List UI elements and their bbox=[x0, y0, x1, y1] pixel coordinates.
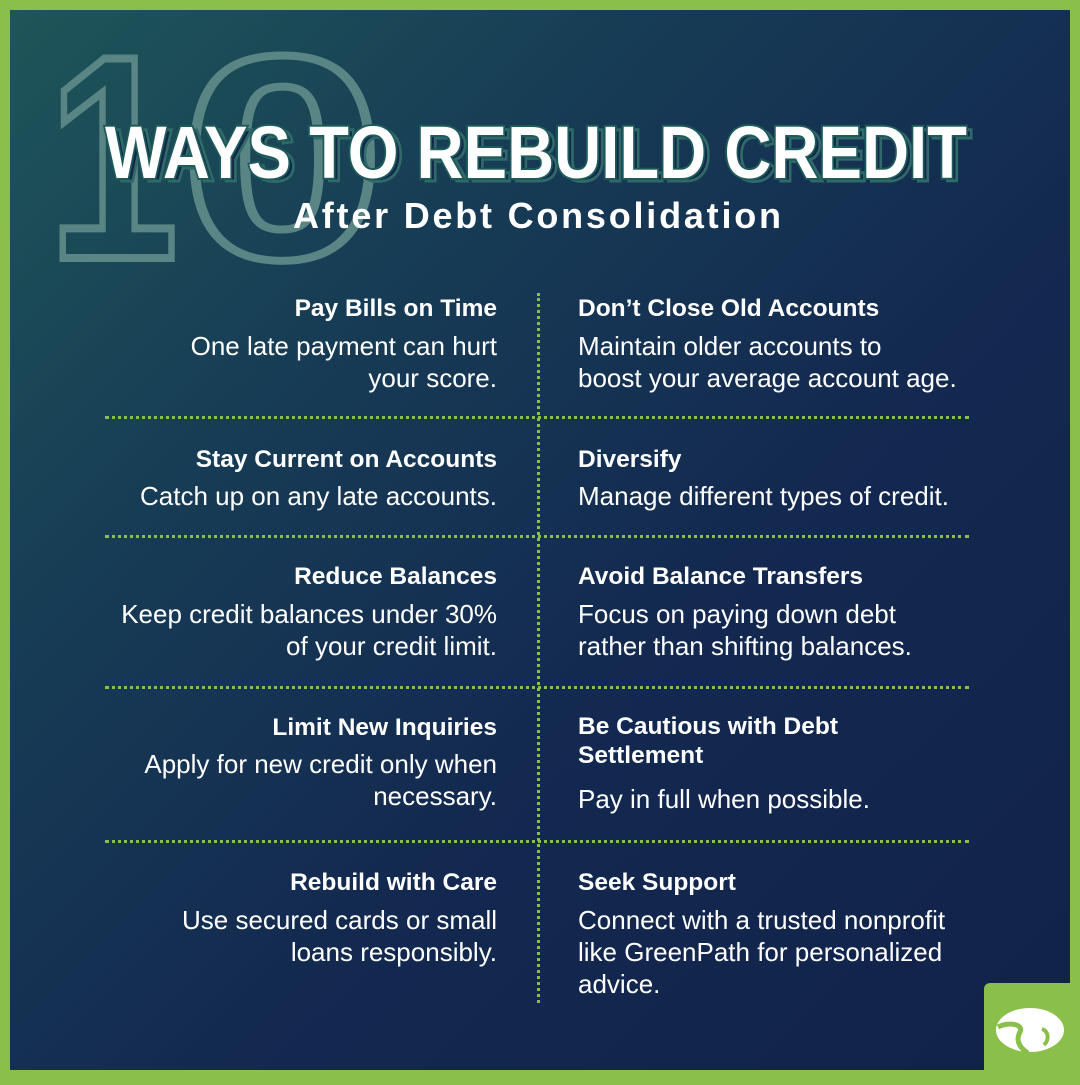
logo bbox=[984, 983, 1080, 1080]
tip: pay bills: One late payment can hurt bbox=[191, 331, 497, 361]
tip: debt settlement: Settlement bbox=[578, 742, 703, 769]
tip: diversify bbox=[578, 446, 949, 511]
tip: reduce balances: of your credit limit. bbox=[286, 631, 497, 661]
tip: reduce balances: Reduce Balances bbox=[294, 563, 497, 590]
tip: rebuild with care: loans responsibly. bbox=[291, 937, 497, 967]
tip: pay bills: Pay Bills on Time bbox=[295, 295, 497, 322]
tip: don't close: boost your average account age. bbox=[578, 363, 957, 393]
tip: stay current: Catch up on any late accounts. bbox=[140, 481, 497, 511]
tip: seek support: Seek Support bbox=[578, 869, 736, 896]
tip: seek support: Connect with a trusted nonprofit bbox=[578, 905, 945, 935]
tip: seek support: like GreenPath for personalized bbox=[578, 937, 942, 967]
tip: limit inquiries: necessary. bbox=[373, 781, 497, 811]
tip: debt settlement: Pay in full when possible. bbox=[578, 784, 870, 814]
tip: limit inquiries: Limit New Inquiries bbox=[272, 714, 497, 741]
tip: don't close bbox=[578, 295, 957, 393]
tip: avoid transfers bbox=[578, 563, 912, 661]
tip: don't close: Maintain older accounts to bbox=[578, 331, 882, 361]
title: WAYS TO REBUILD CREDIT bbox=[105, 111, 967, 194]
tip: pay bills: your score. bbox=[368, 363, 497, 393]
tip: avoid transfers: rather than shifting balances. bbox=[578, 631, 912, 661]
tip: debt settlement: Be Cautious with Debt bbox=[578, 713, 838, 740]
tip: diversify: Manage different types of credit. bbox=[578, 481, 949, 511]
tip: reduce balances bbox=[121, 563, 497, 661]
tip: debt settlement bbox=[578, 713, 870, 814]
tip: seek support bbox=[578, 869, 945, 999]
tip: stay current: Stay Current on Accounts bbox=[196, 446, 497, 473]
title: WAYS TO REBUILD CREDIT bbox=[110, 114, 972, 197]
tip: diversify: Diversify bbox=[578, 446, 682, 473]
tip: limit inquiries: Apply for new credit only when bbox=[144, 749, 497, 779]
big outlined 10 bbox=[48, 0, 385, 300]
tip: stay current bbox=[140, 446, 497, 511]
title bbox=[102, 111, 972, 236]
tip: seek support: advice. bbox=[578, 969, 660, 999]
tip: avoid transfers: Avoid Balance Transfers bbox=[578, 563, 863, 590]
tip: avoid transfers: Focus on paying down debt bbox=[578, 599, 896, 629]
tip: rebuild with care bbox=[182, 869, 497, 967]
subtitle: After Debt Consolidation bbox=[293, 195, 781, 236]
tip: don't close: Don’t Close Old Accounts bbox=[578, 295, 879, 322]
tip: pay bills bbox=[191, 295, 497, 393]
tip: limit inquiries bbox=[144, 714, 497, 811]
tip: rebuild with care: Use secured cards or small bbox=[182, 905, 497, 935]
tip: reduce balances: Keep credit balances under 30% bbox=[121, 599, 497, 629]
tip: rebuild with care: Rebuild with Care bbox=[290, 869, 497, 896]
